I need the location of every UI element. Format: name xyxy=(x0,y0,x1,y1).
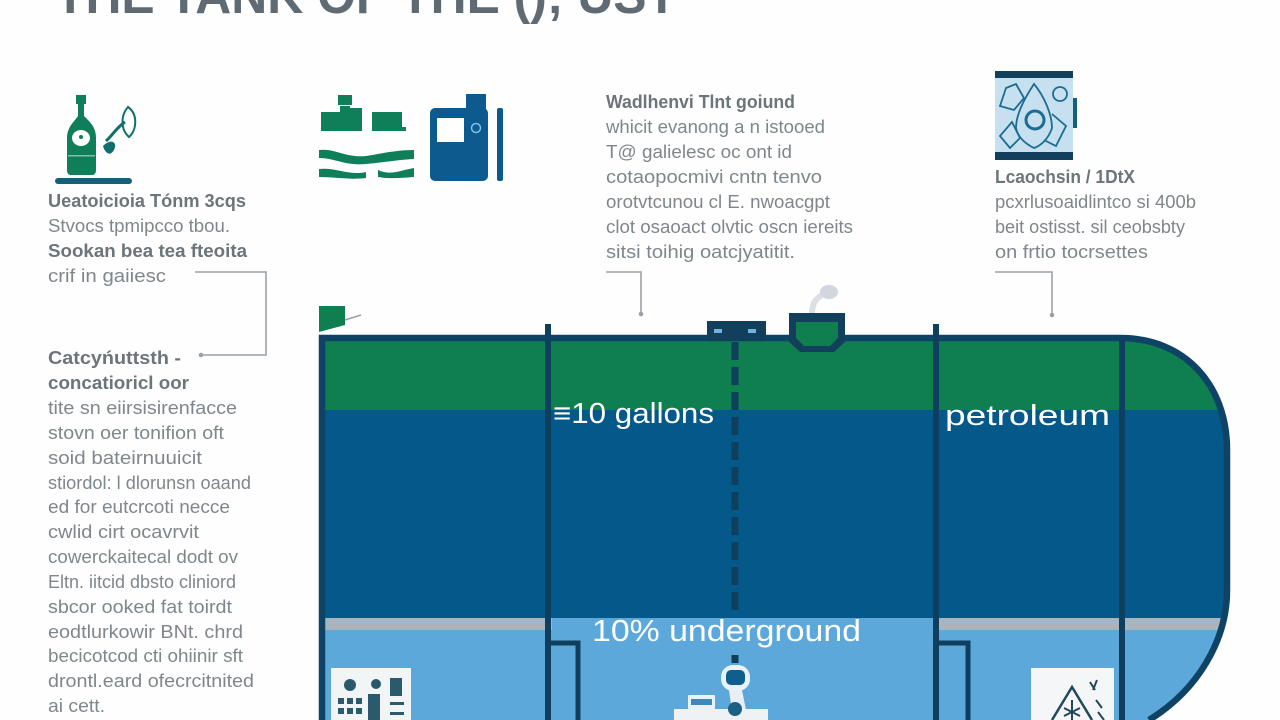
text block: top left xyxy=(48,190,248,286)
text block: top left: crif in gaiiesc xyxy=(48,265,166,286)
text block: right: Lcaochsin / 1DtX xyxy=(995,166,1136,187)
text block: left column: Catcyńuttsth - xyxy=(48,347,181,368)
text block: center: sitsi toihig oatcjyatitit. xyxy=(606,241,795,262)
tank outline xyxy=(322,338,1227,720)
text block: center: clot osaoact olvtic oscn iereits xyxy=(606,216,853,237)
text block: left column: cowerckaitecal dodt ov xyxy=(48,546,239,567)
tank xyxy=(319,324,1239,720)
label: petroleum: petroleum xyxy=(945,400,1110,432)
vent smoke xyxy=(812,292,826,314)
connector: left bracket xyxy=(195,272,266,356)
text block: left column: sbcor ooked fat toirdt xyxy=(48,596,232,617)
text block: left column: ed for eutcrcoti necce xyxy=(48,496,230,517)
divider left xyxy=(545,324,551,720)
divider right xyxy=(933,324,939,720)
icon: left chart panel xyxy=(331,668,411,720)
fitting: fill cup xyxy=(789,313,845,352)
text block: center: Wadlhenvi Tlnt goiund xyxy=(606,91,795,112)
icon: blue fuel jug xyxy=(430,94,503,181)
icon: center pump machine xyxy=(674,665,768,720)
text block: center: T@ galielesc oc ont id xyxy=(606,141,792,162)
icon: bottle and leaf xyxy=(55,95,135,184)
text block: left column: cwlid cirt ocavrvit xyxy=(48,521,199,542)
text block: left column: tite sn eiirsisirenfacce xyxy=(48,397,237,418)
connector: center callout xyxy=(606,272,642,316)
text block: right: on frtio tocrsettes xyxy=(995,241,1148,262)
text block: center: whicit evanong a n istooed xyxy=(605,116,825,137)
text block: left column: concatioricl oor xyxy=(48,372,189,393)
dashed center line xyxy=(732,342,738,688)
icon: right hazard panel xyxy=(1031,668,1114,720)
text block: center: orotvtcunou cl E. nwoacgpt xyxy=(606,191,830,212)
text block: left column: Eltn. iitcid dbsto cliniord xyxy=(48,571,236,592)
text block: right: beit ostisst. sil ceobsbty xyxy=(995,216,1186,237)
text block: left column: soid bateirnuuicit xyxy=(48,447,202,468)
icon: hazard molecule panel xyxy=(995,71,1077,160)
layer: grey band xyxy=(319,618,1239,630)
fitting: top hatch xyxy=(707,321,766,341)
text block: center: cotaopocmivi cntn tenvo xyxy=(606,166,822,187)
vent smoke cap xyxy=(820,285,838,299)
text block: top left: Sookan bea tea fteoita xyxy=(48,240,248,261)
inner bracket left xyxy=(551,643,578,720)
text block: left column: becicotcod cti ohiinir sft xyxy=(48,645,243,666)
text block: top left: Ueatoicioia Tónm 3cqs xyxy=(48,190,246,211)
divider far right xyxy=(1119,340,1125,720)
label: gallons: ≡10 gallons xyxy=(553,398,714,430)
inner bracket right xyxy=(939,643,968,720)
label: underground: 10% underground xyxy=(592,613,861,648)
text block: center xyxy=(605,91,853,262)
text block: right xyxy=(995,166,1196,262)
text block: left column: stiordol: l dlorunsn oaand xyxy=(48,472,251,493)
text block: left column: ai cett. xyxy=(48,695,105,716)
text block: left column xyxy=(48,347,254,716)
flag marker xyxy=(319,306,361,332)
band cover under label xyxy=(552,618,933,630)
layer: green top xyxy=(319,338,1239,410)
text block: left column: drontl.eard ofecrcitnited xyxy=(48,670,254,691)
text block: left column: stovn oer tonifion oft xyxy=(48,422,224,443)
text block: left column: eodtlurkowir BNt. chrd xyxy=(48,621,243,642)
text block: right: pcxrlusoaidlintco si 400b xyxy=(995,191,1196,212)
icon: green cargo and waves xyxy=(319,95,414,179)
connector: right callout xyxy=(995,272,1054,316)
layer: light blue underground xyxy=(319,630,1239,720)
text block: top left: Stvocs tpmipcco tbou. xyxy=(48,215,230,236)
layer: navy petroleum xyxy=(319,410,1239,618)
